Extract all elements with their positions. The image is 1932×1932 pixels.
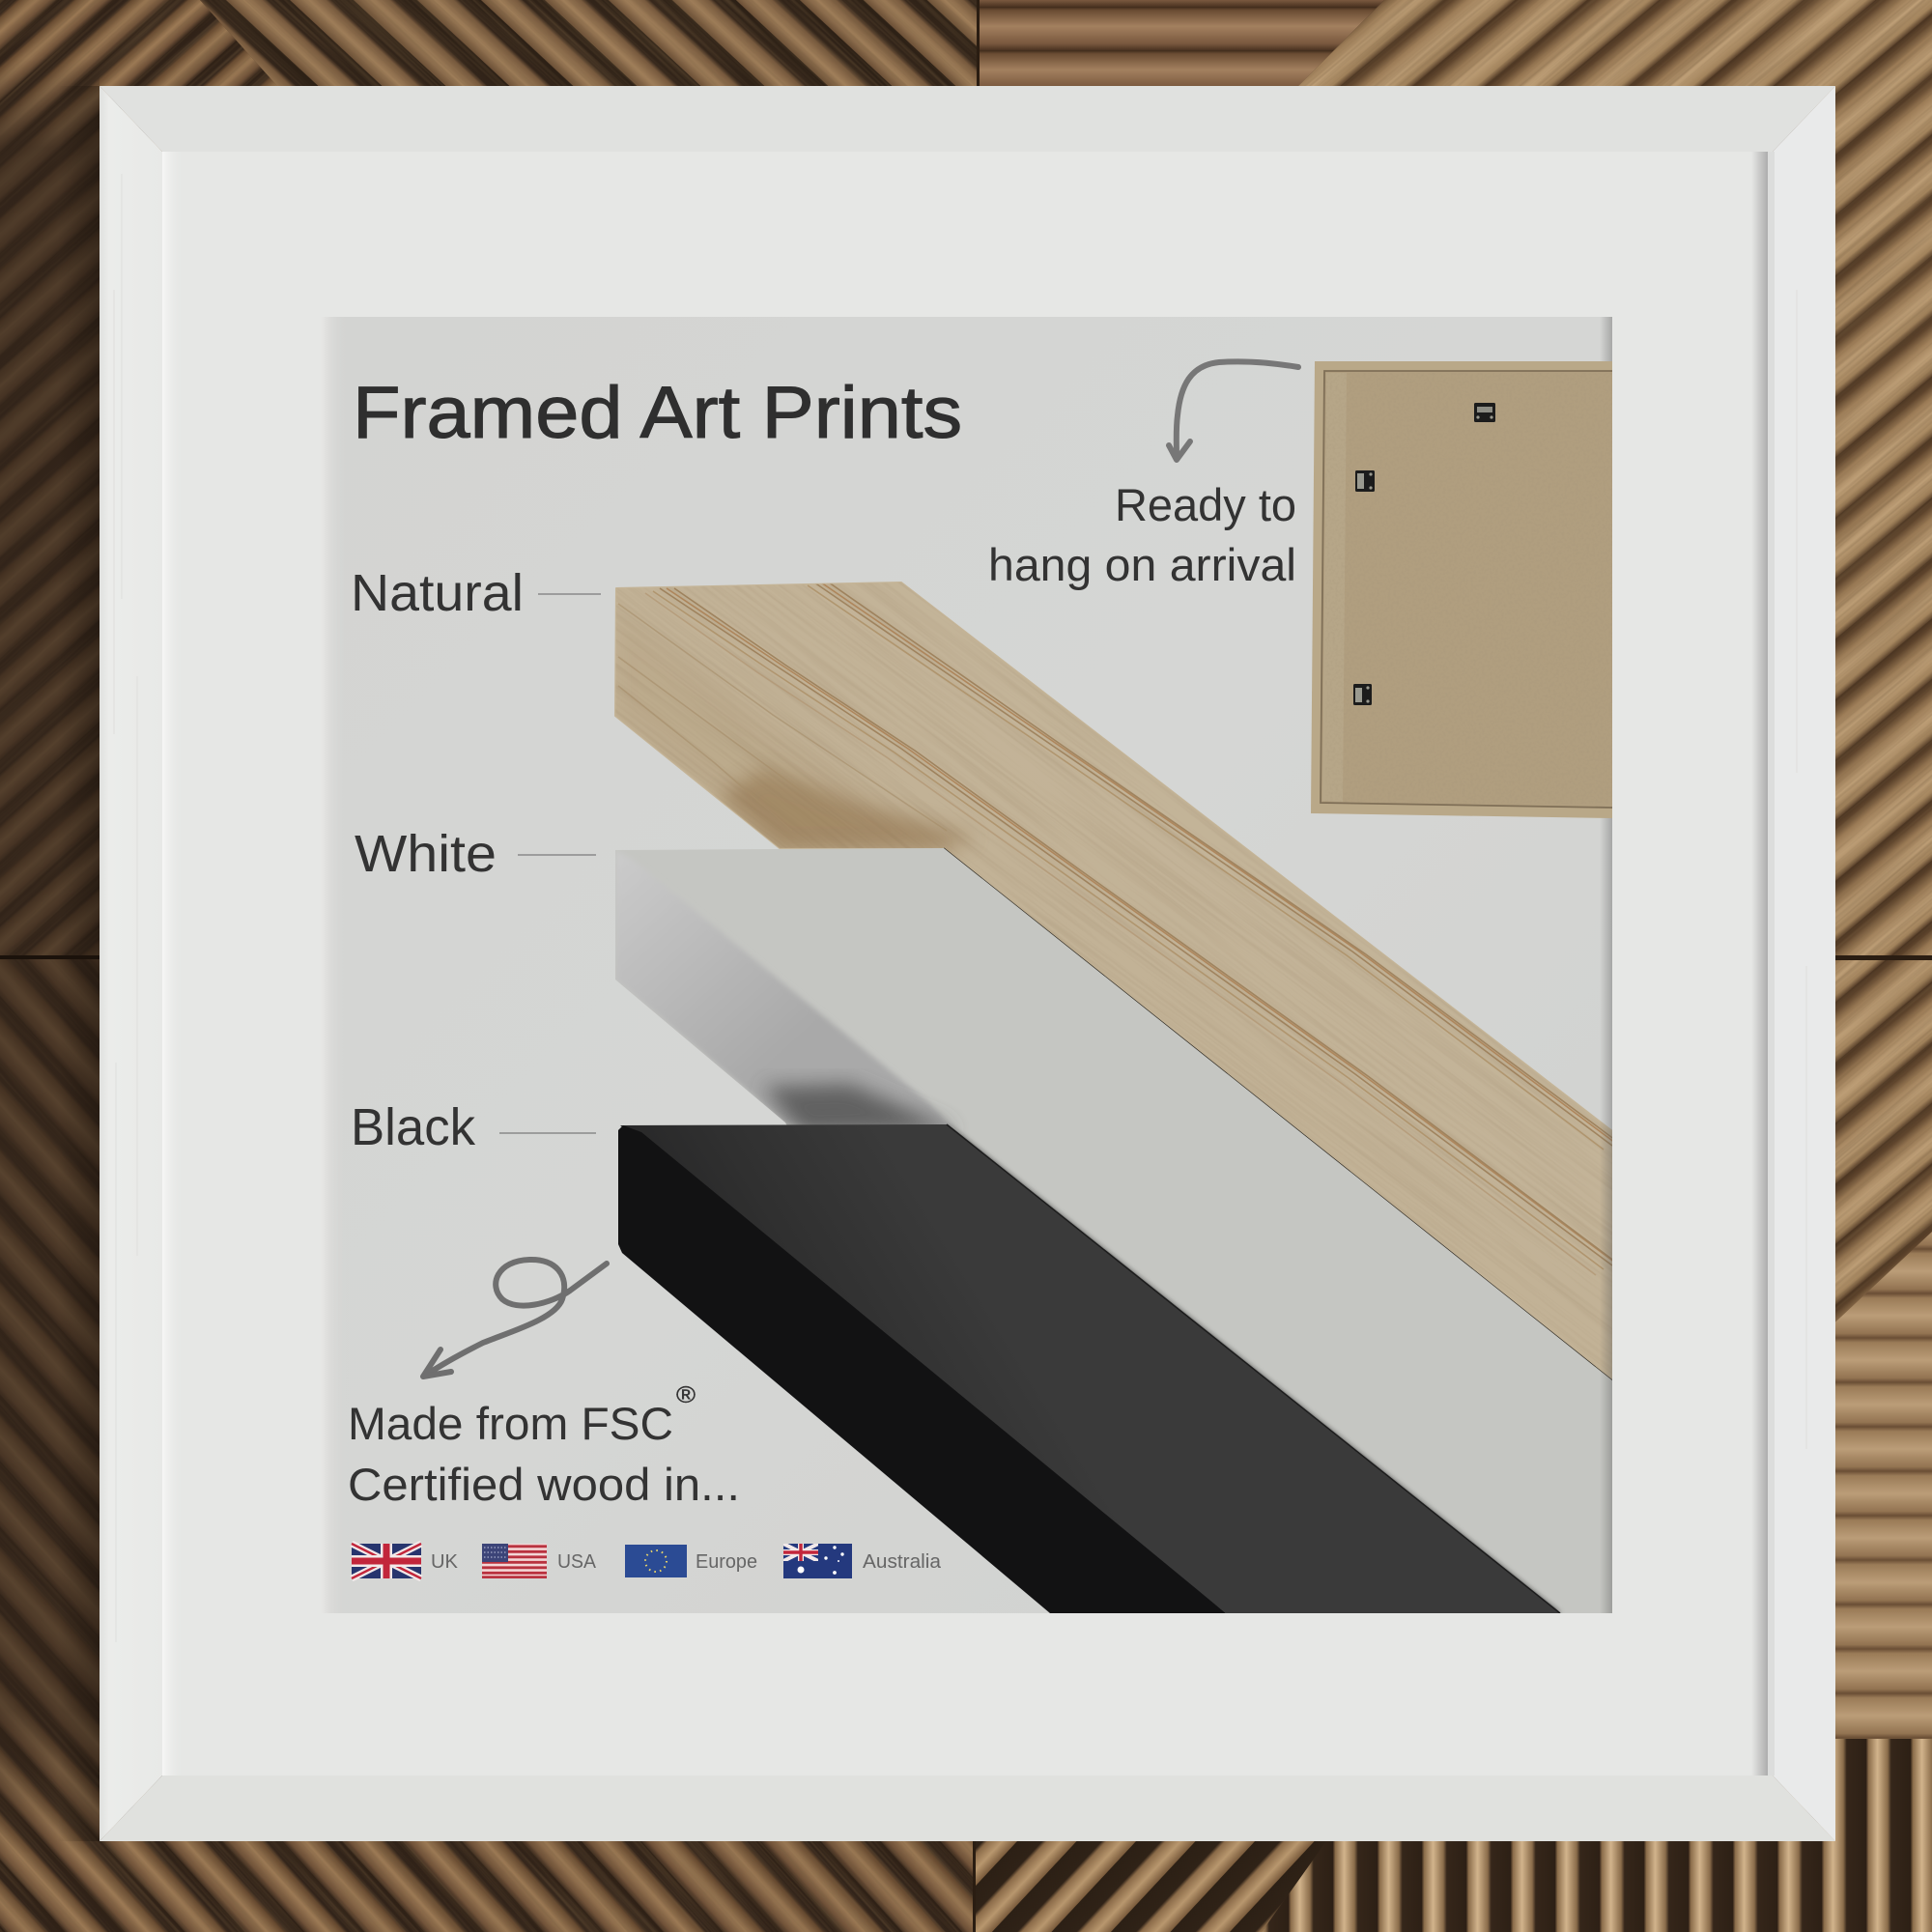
inset: back of frame [1311,361,1612,818]
text: ready to hang [988,479,1296,590]
flag: Europe [625,1545,687,1577]
text: FSC note: Certified wood in... [348,1459,740,1510]
text: FSC note: ® [676,1382,696,1408]
text: FSC note: Made from FSC [348,1398,673,1449]
flag label: Australia: Australia [863,1551,942,1573]
flag label: Europe: Europe [696,1551,757,1573]
text: ready to hang: hang on arrival [988,539,1296,590]
window edge shading [321,317,1612,1613]
white frame sample [615,848,1612,1613]
flag label: UK: UK [431,1551,459,1573]
flag: UK [352,1544,421,1578]
flag label: USA: USA [557,1551,597,1573]
natural bar lower edge line [944,848,1612,1380]
hanger top [1474,403,1495,422]
flag: USA [482,1544,547,1578]
passe-partout mat [162,152,1775,1776]
natural wood frame sample [614,582,1612,1380]
print background [321,317,1612,1613]
flag: Australia [783,1544,852,1578]
label: White: White [355,825,497,883]
title: Framed Art Prints [353,372,962,454]
black frame sample [618,1124,1560,1615]
arrow: curved to hanging note [1169,361,1298,460]
text: FSC note [348,1382,740,1510]
print window [321,317,1623,1615]
label: Black: Black [351,1098,476,1156]
label: Natural: Natural [351,564,524,622]
hanger left lower [1353,684,1372,705]
text: ready to hang: Ready to [1115,479,1296,530]
hanger left upper [1355,470,1375,492]
arrow: looped to FSC note [423,1260,607,1377]
